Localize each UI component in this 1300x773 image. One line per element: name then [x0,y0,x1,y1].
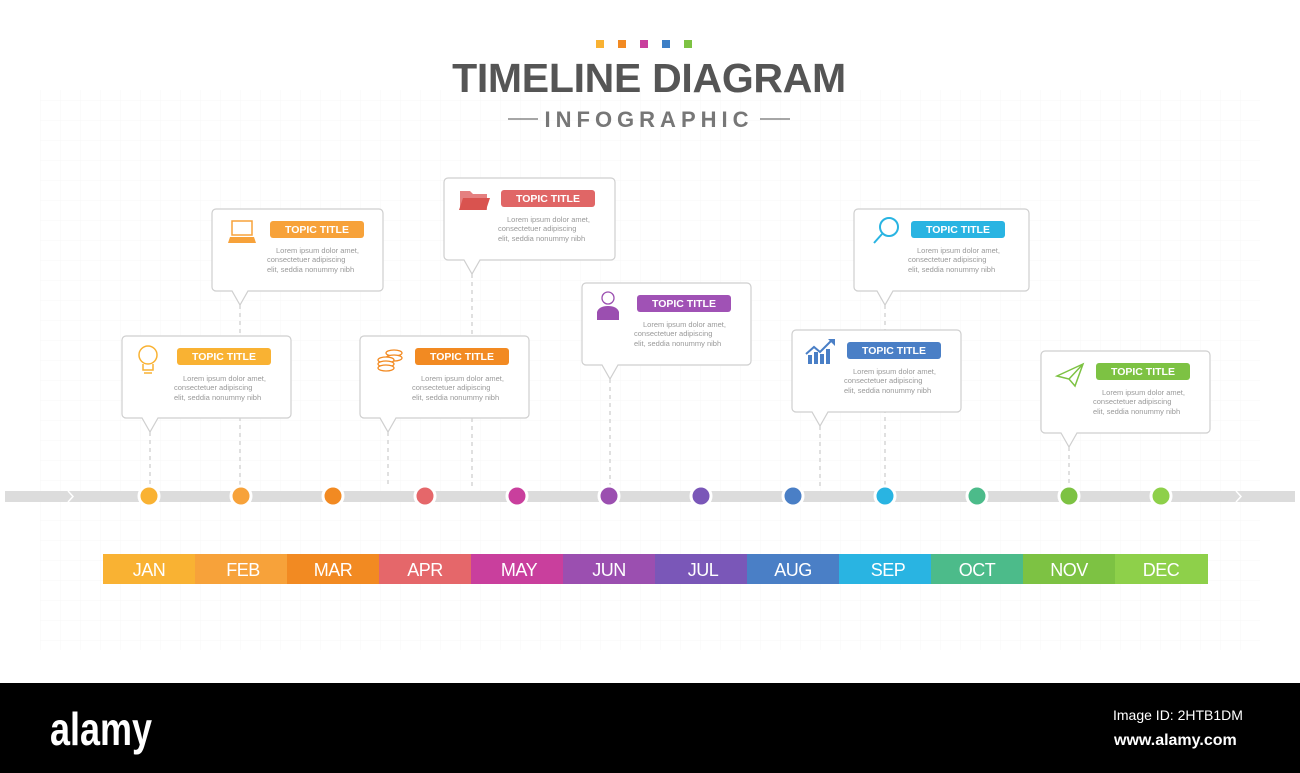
callout: JUN [582,283,751,379]
callout: JAN: TOPIC TITLE [192,351,256,363]
callout: SEP [854,209,1029,305]
callout: JUN: consectetuer adipiscing [634,329,712,338]
callout: NOV: consectetuer adipiscing [1093,397,1171,406]
timeline dots [139,486,1171,506]
callout: FEB [212,209,383,305]
callout: NOV [1041,351,1210,447]
footer: Image ID: 2HTB1DM [1113,707,1243,723]
callout: JAN: elit, seddia nonummy nibh [174,393,261,402]
month bar: MAR [314,560,353,580]
callout: MAR: consectetuer adipiscing [412,383,490,392]
month bar: DEC [1143,560,1180,580]
callout: APR [444,178,615,274]
callout: JUN: TOPIC TITLE [652,298,716,310]
month bar: SEP [871,560,906,580]
month bar: NOV [1050,560,1088,580]
footer: www.alamy.com [1113,732,1237,749]
footer: alamy [50,703,152,755]
callout: JAN: Lorem ipsum dolor amet, [183,374,266,383]
month bar: APR [407,560,443,580]
callout: MAR: TOPIC TITLE [430,351,494,363]
callout: APR: elit, seddia nonummy nibh [498,234,585,243]
month bar [103,554,1208,584]
callout: NOV: TOPIC TITLE [1111,366,1175,378]
callout: NOV: Lorem ipsum dolor amet, [1102,388,1185,397]
callout: MAR: Lorem ipsum dolor amet, [421,374,504,383]
callout: FEB: elit, seddia nonummy nibh [267,265,354,274]
callout: AUG [792,330,961,426]
callout: AUG: consectetuer adipiscing [844,376,922,385]
title: TIMELINE DIAGRAM [452,55,846,101]
callout: APR: Lorem ipsum dolor amet, [507,215,590,224]
subtitle: INFOGRAPHIC [544,107,754,132]
month bar: JUL [688,560,719,580]
callout: FEB: consectetuer adipiscing [267,255,345,264]
callout: MAR: elit, seddia nonummy nibh [412,393,499,402]
callout: JUN: Lorem ipsum dolor amet, [643,320,726,329]
month bar: AUG [774,560,812,580]
callout: NOV: elit, seddia nonummy nibh [1093,407,1180,416]
footer [0,683,1300,773]
month bar: MAY [501,560,538,580]
callout: APR: consectetuer adipiscing [498,224,576,233]
title squares [596,40,692,48]
month bar: JAN [133,560,165,580]
callout: AUG: TOPIC TITLE [862,345,926,357]
callout: MAR [360,336,529,432]
month bar: FEB [226,560,260,580]
month bar: OCT [959,560,996,580]
timeline bar [5,491,1295,502]
callout: APR: TOPIC TITLE [516,193,580,205]
callout: JUN: elit, seddia nonummy nibh [634,339,721,348]
callout: SEP: Lorem ipsum dolor amet, [917,246,1000,255]
callout: FEB: Lorem ipsum dolor amet, [276,246,359,255]
callout: AUG: Lorem ipsum dolor amet, [853,367,936,376]
callout: SEP: elit, seddia nonummy nibh [908,265,995,274]
callout: SEP: consectetuer adipiscing [908,255,986,264]
dashed connectors [150,274,1069,486]
callout: FEB: TOPIC TITLE [285,224,349,236]
callout: JAN [122,336,291,432]
month bar: JUN [592,560,626,580]
callout: SEP: TOPIC TITLE [926,224,990,236]
callout: AUG: elit, seddia nonummy nibh [844,386,931,395]
callout: JAN: consectetuer adipiscing [174,383,252,392]
